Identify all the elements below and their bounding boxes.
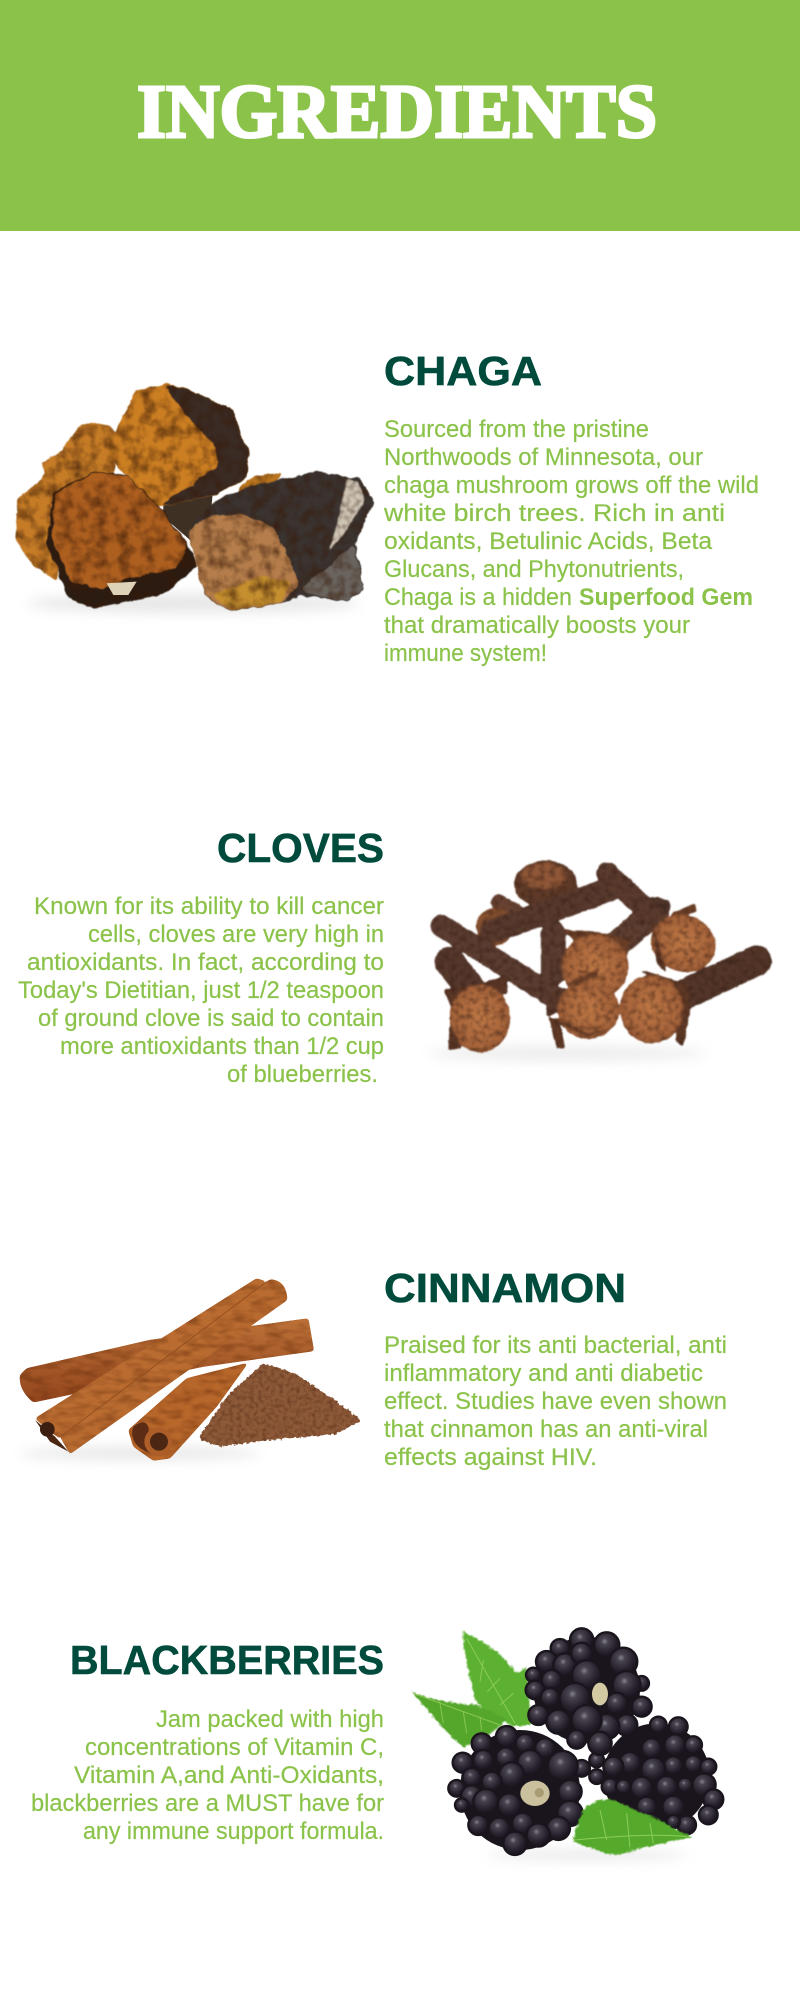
text block: cloves description: more antioxidants than 1/2 cup: [60, 1033, 384, 1060]
text block: blackberries description: [31, 1706, 384, 1845]
image: chaga mushroom: [15, 383, 373, 613]
text block: blackberries description: Jam packed with high: [156, 1706, 384, 1733]
text block: chaga description: Northwoods of Minnesota, our: [384, 444, 703, 471]
text block: cloves description: Today's Dietitian, just 1/2 teaspoon: [18, 977, 384, 1004]
panel: cinnamon: [20, 1265, 727, 1471]
text block: chaga description: Chaga is a hidden: [384, 584, 572, 611]
heading: cloves: CLOVES: [217, 825, 384, 871]
text block: cinnamon description: effect. Studies have even shown: [384, 1388, 727, 1415]
text block: chaga description: that dramatically boosts your: [384, 612, 690, 639]
image: cinnamon: [20, 1278, 362, 1461]
text block: blackberries description: any immune support formula.: [83, 1818, 384, 1845]
heading: chaga: CHAGA: [384, 348, 542, 394]
panel: cloves: [18, 825, 757, 1088]
image: cloves: [427, 861, 757, 1061]
text block: cinnamon description: inflammatory and anti diabetic: [384, 1360, 703, 1387]
text block: cloves description: of ground clove is said to contain: [38, 1005, 384, 1032]
text block: chaga description: oxidants, Betulinic Acids, Beta: [384, 528, 713, 555]
text block: chaga description: white birch trees. Rich in anti: [383, 500, 725, 527]
title: INGREDIENTS: [137, 70, 657, 154]
text block: cloves description: Known for its ability to kill cancer: [34, 893, 384, 920]
header banner: [0, 0, 800, 231]
text block: blackberries description: Vitamin A,and Anti-Oxidants,: [74, 1762, 384, 1789]
panel: blackberries: [31, 1628, 723, 1860]
text block: cloves description: cells, cloves are very high in: [88, 921, 384, 948]
text block: blackberries description: blackberries are a MUST have for: [31, 1790, 384, 1817]
text block: chaga description: Sourced from the pristine: [384, 416, 649, 443]
text block: cloves description: antioxidants. In fact, according to: [27, 949, 384, 976]
text block: chaga description: immune system!: [384, 640, 547, 667]
image: blackberries: [412, 1628, 723, 1860]
text block: chaga description: Glucans, and Phytonutrients,: [384, 556, 684, 583]
heading: blackberries: BLACKBERRIES: [70, 1637, 384, 1683]
text block: chaga description: Superfood Gem: [579, 584, 753, 611]
text block: blackberries description: concentrations of Vitamin C,: [85, 1734, 384, 1761]
text block: cloves description: [18, 893, 384, 1088]
text block: cinnamon description: that cinnamon has an anti-viral: [384, 1416, 708, 1443]
panel: chaga: [15, 348, 759, 667]
text block: cinnamon description: [384, 1332, 727, 1471]
text block: chaga description: [383, 416, 759, 667]
text block: cinnamon description: effects against HIV.: [384, 1444, 597, 1471]
heading: cinnamon: CINNAMON: [384, 1265, 626, 1311]
text block: cinnamon description: Praised for its anti bacterial, anti: [384, 1332, 727, 1359]
text block: cloves description: of blueberries.: [227, 1061, 378, 1088]
text block: chaga description: chaga mushroom grows off the wild: [384, 472, 759, 499]
